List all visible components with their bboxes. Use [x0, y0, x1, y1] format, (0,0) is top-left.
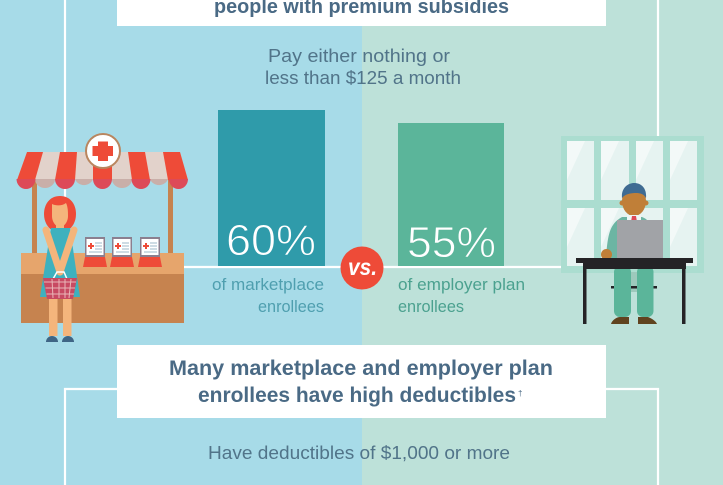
heading: premium subsidies — [117, 0, 606, 26]
badge: vs. — [340, 246, 384, 290]
icon: health insurance market stall with shopper — [16, 134, 188, 342]
bar: marketplace 60%: 60% — [226, 216, 316, 265]
label: marketplace enrollees — [212, 275, 324, 316]
icon: desk — [576, 258, 693, 324]
panel: marketplace background — [0, 0, 362, 485]
label: marketplace enrollees: of marketplace — [212, 275, 324, 294]
heading: high deductibles: enrollees have high deductibles — [198, 383, 516, 407]
icon: office window — [561, 136, 704, 273]
text: monthly premium description: less than $125 a month — [265, 67, 461, 88]
icon: office worker at desk by window — [561, 136, 704, 324]
label: marketplace enrollees: enrollees — [258, 297, 324, 316]
text: monthly premium description: Pay either nothing or — [268, 45, 450, 66]
panel: employer background — [362, 0, 723, 485]
heading: high deductibles — [117, 345, 606, 418]
bar: employer 55% — [398, 123, 504, 267]
icon: insurance plan leaflets — [83, 237, 162, 267]
label: employer plan enrollees — [398, 275, 525, 316]
heading: high deductibles: † — [518, 389, 522, 398]
text: monthly premium description — [265, 45, 461, 88]
bar: marketplace 60% — [218, 110, 325, 266]
icon: woman with basket — [40, 196, 80, 342]
bar: employer 55%: 55% — [407, 218, 496, 267]
text: deductible description: Have deductibles of $1,000 or more — [208, 442, 510, 463]
icon: man — [601, 183, 663, 324]
label: employer plan enrollees: of employer plan — [398, 275, 525, 294]
badge: vs.: vs. — [348, 254, 377, 280]
label: employer plan enrollees: enrollees — [398, 297, 464, 316]
icon: red cross sign — [86, 134, 120, 168]
heading: high deductibles: Many marketplace and employer plan — [169, 356, 553, 380]
